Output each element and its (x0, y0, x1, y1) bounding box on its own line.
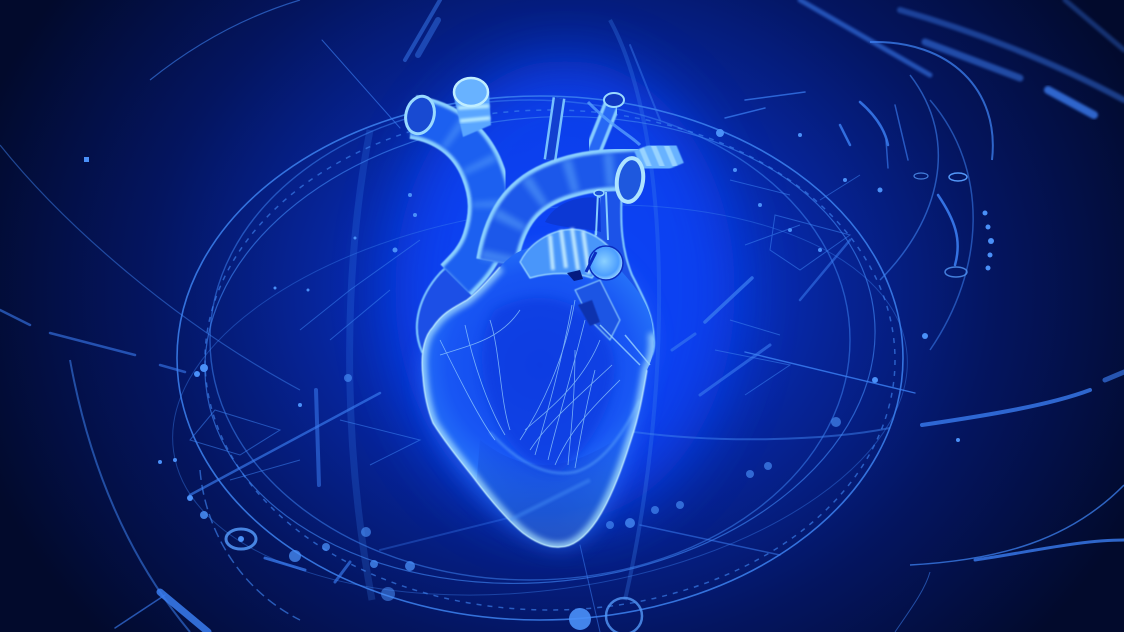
inner chamber (482, 298, 614, 472)
HUD circles (226, 173, 967, 632)
pulmonary trunk (520, 228, 623, 281)
vessel: aortic arch (497, 149, 678, 262)
vessel: left tube opening (402, 93, 438, 137)
edge rim (422, 267, 654, 547)
highlight streak (510, 480, 590, 520)
right-side valve detail (575, 280, 650, 365)
lower shading (477, 450, 620, 547)
left atrium lobe (417, 235, 520, 352)
ventricle body (422, 248, 654, 548)
lower chamber edge (490, 400, 640, 473)
heart outer glow (423, 247, 653, 547)
vessel: left brachiocephalic tube (413, 117, 490, 280)
vessel: top stub (453, 78, 491, 137)
HUD dots (84, 129, 994, 630)
arch inner gap (545, 197, 601, 232)
vessel: aortic opening (614, 156, 646, 204)
glow behind heart (395, 60, 735, 520)
vessel: descending right tube (590, 190, 654, 371)
data traces (190, 175, 860, 480)
vessel: thin vessels (550, 98, 640, 160)
pulmonary bulb (589, 246, 623, 280)
heart (400, 78, 680, 560)
fibres (440, 300, 620, 468)
body outline (422, 267, 647, 547)
